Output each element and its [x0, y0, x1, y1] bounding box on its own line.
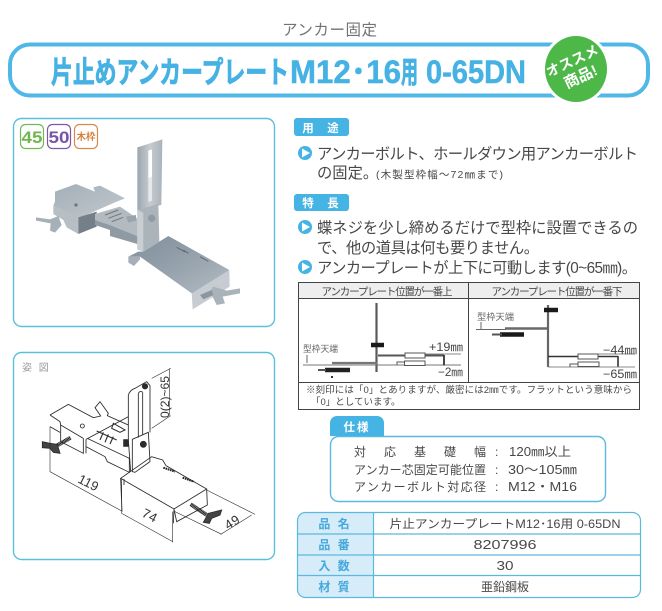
recommended badge: 商品! — [561, 62, 600, 92]
text block: features: アンカープレートが上下に可動します(0~65㎜)。 — [317, 260, 637, 277]
dimension: 119: 119 — [76, 471, 101, 494]
row: product number — [318, 537, 536, 552]
spec lines: 30〜105㎜ — [508, 463, 578, 477]
row: material: 材 質 — [318, 579, 352, 594]
title banner: 用 — [401, 57, 418, 90]
dimension: 0(2)~65: 0(2)~65 — [158, 376, 172, 418]
badge: wood formwork: 木枠 — [76, 131, 96, 143]
badge: 50: 50 — [48, 128, 70, 147]
tab: specifications: 仕様 — [344, 420, 370, 434]
text block: use description: (木製型枠幅〜72㎜まで) — [376, 168, 503, 181]
badge: 45: 45 — [22, 128, 42, 147]
title banner — [10, 44, 648, 96]
row: product number: 品 番 — [318, 538, 352, 552]
section label: features — [294, 194, 349, 211]
bullet — [298, 220, 312, 234]
label: form top edge: 型枠天端 — [303, 343, 338, 354]
text block: use description: の固定。 — [317, 165, 378, 182]
dimension: -65: −65㎜ — [603, 369, 638, 381]
drawing: bracket outline with dimensions — [42, 368, 255, 542]
row: product name: 片止アンカープレートM12･16用 0-65DN — [390, 517, 620, 531]
spec lines — [354, 444, 578, 494]
panel: product photo — [14, 118, 274, 326]
section label: features: 特 長 — [302, 196, 340, 210]
note: ※刻印には「0」とありますが、厳密には2㎜です。フラットという意味から — [306, 384, 632, 396]
tab: specifications — [330, 416, 384, 436]
section label: use: 用 途 — [302, 121, 340, 135]
row: material: 亜鉛鋼板 — [481, 580, 529, 594]
spec lines: 対 応 基 礎 幅 — [354, 444, 486, 459]
row: product name: 品 名 — [318, 516, 352, 531]
row: product name — [318, 516, 620, 531]
header: bottom position: アンカープレート位置が一番下 — [492, 285, 622, 298]
header: top position: アンカープレート位置が一番上 — [322, 285, 452, 298]
dimension: -2: −2㎜ — [438, 367, 463, 379]
text block: use description: アンカーボルト、ホールダウン用アンカーボルト — [317, 146, 638, 163]
row: material — [318, 579, 529, 594]
text block: features: で、他の道具は何も要りません。 — [317, 240, 539, 257]
section label: use — [294, 118, 349, 136]
diagram: top position — [303, 303, 461, 378]
recommended badge: オススメ — [543, 42, 601, 80]
dimension: -44: −44㎜ — [603, 345, 638, 357]
label: drawing: 姿 図 — [22, 361, 51, 374]
spec lines: 120㎜以上 — [509, 445, 571, 459]
row: quantity: 30 — [496, 558, 514, 573]
spec lines: アンカーボルト対応径 — [354, 480, 486, 494]
title banner: M12･16 — [290, 54, 401, 90]
row: product number: 8207996 — [474, 537, 536, 552]
spec lines: M12・M16 — [508, 480, 577, 494]
row: quantity: 入 数 — [318, 558, 352, 573]
photo: anchor plate bracket — [36, 139, 240, 309]
dimension: +19: +19㎜ — [429, 342, 464, 354]
category heading: アンカー固定 — [282, 21, 377, 39]
spec lines: : — [495, 463, 498, 477]
table: product details — [297, 512, 640, 598]
badge: 50 — [48, 124, 70, 148]
text block: features — [298, 220, 638, 277]
diagram: bottom position — [476, 305, 635, 367]
text block: features: 蝶ネジを少し締めるだけで型枠に設置できるの — [317, 220, 638, 237]
spec lines: : — [495, 480, 498, 494]
text block: use description — [298, 146, 638, 182]
table: plate positions — [298, 282, 640, 410]
panel: specifications — [330, 416, 606, 502]
dimension: 49: 49 — [222, 512, 242, 533]
note — [306, 384, 632, 408]
title banner: 片止めアンカープレート — [51, 57, 289, 90]
panel: dimension drawing — [14, 352, 274, 560]
badge: 45 — [20, 124, 44, 148]
recommended badge — [541, 34, 611, 104]
bullet — [298, 146, 312, 160]
bullet — [298, 260, 312, 274]
spec lines: アンカー芯固定可能位置 — [354, 463, 486, 477]
badge: wood formwork — [74, 124, 98, 148]
spec lines: : — [495, 445, 498, 459]
row: quantity — [318, 558, 514, 573]
dimension: 74: 74 — [140, 505, 160, 525]
label: form top edge: 型枠天端 — [477, 311, 514, 322]
note: 「0」としています。 — [311, 397, 401, 408]
title banner: 0-65DN — [426, 54, 526, 90]
